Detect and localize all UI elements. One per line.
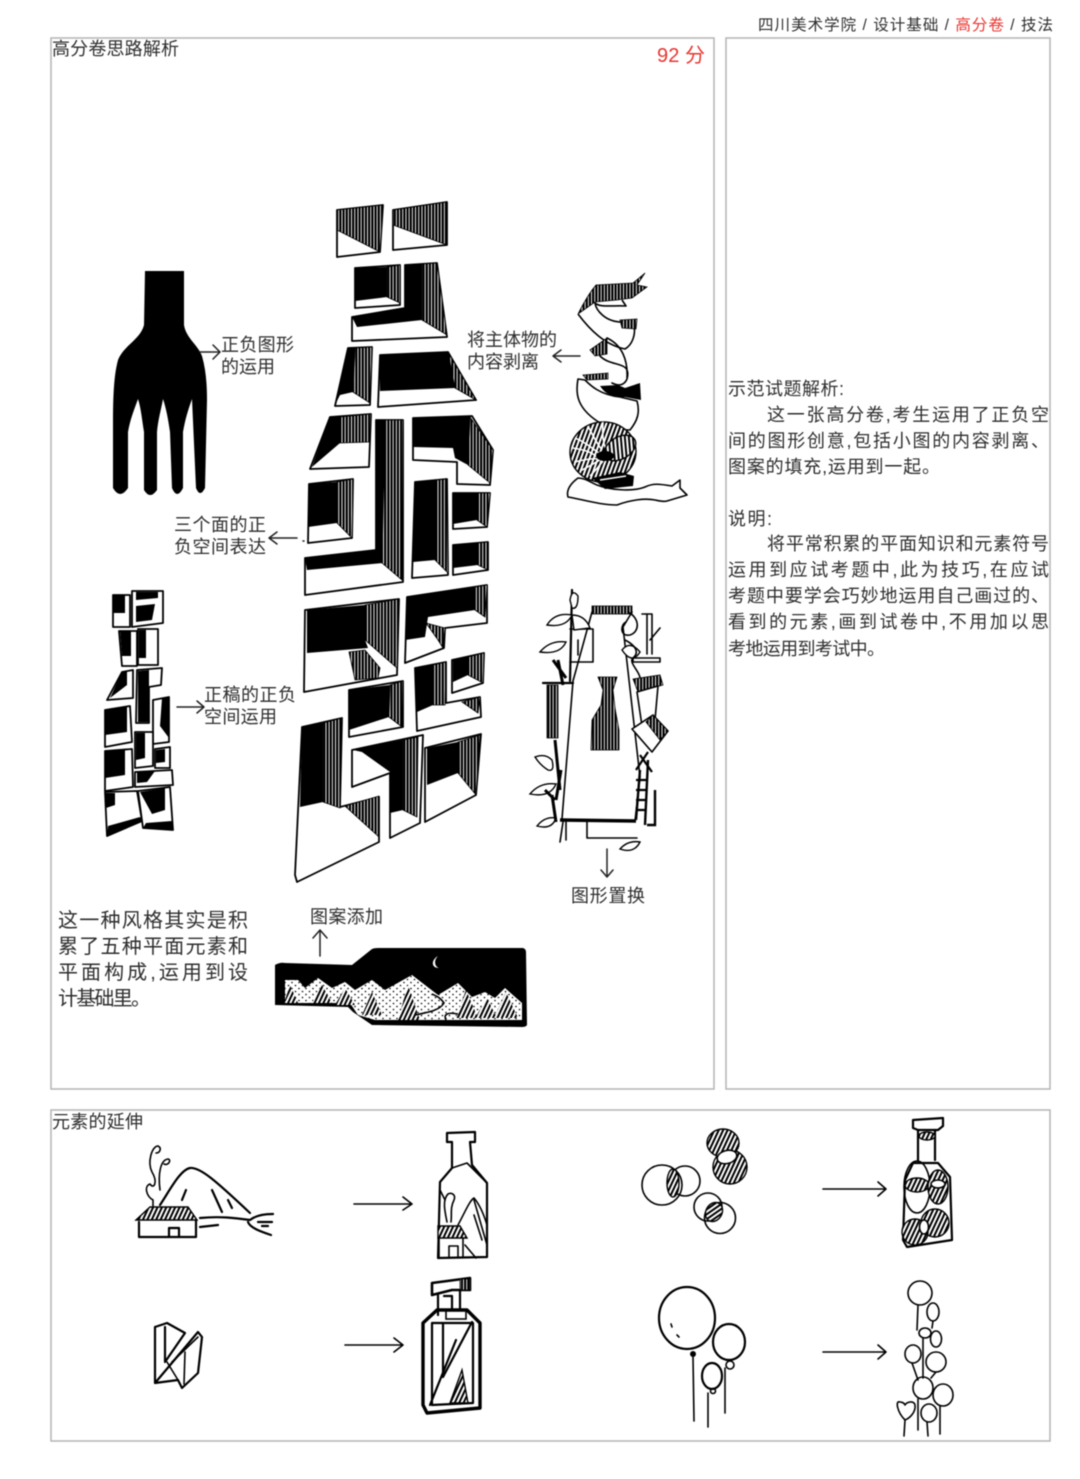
window: shoulder right bbox=[378, 352, 476, 407]
draft window nine bbox=[135, 732, 153, 768]
small draft bottle bbox=[105, 591, 173, 836]
house bbox=[438, 1226, 467, 1238]
window: central L column bbox=[305, 420, 403, 595]
window: shoulder left bbox=[335, 347, 372, 406]
window: right small two bbox=[453, 542, 488, 575]
text: exam analysis bbox=[728, 379, 1049, 659]
window: upper left bbox=[310, 414, 371, 469]
label: positive negative figure: 正负图形 bbox=[221, 335, 294, 355]
frame body bbox=[562, 612, 640, 821]
label: space usage: 空间运用 bbox=[204, 707, 277, 727]
neck ring bbox=[919, 1132, 935, 1140]
lower right dark ladder rungs bbox=[636, 752, 652, 810]
ribbon twist bbox=[590, 338, 607, 356]
trigger hatch bbox=[460, 1279, 470, 1290]
cap bbox=[913, 1118, 943, 1130]
wall and door bbox=[139, 1220, 196, 1237]
lower right ladder bbox=[636, 760, 655, 825]
label: content peeling: 内容剥离 bbox=[467, 352, 539, 372]
house body bbox=[439, 1238, 476, 1258]
river bbox=[415, 994, 458, 1020]
ribbon lower coil bbox=[592, 472, 634, 489]
mountain contour bbox=[440, 1163, 487, 1245]
line 2: 间的图形创意,包括小图的内容剥离、 bbox=[728, 431, 1049, 451]
label: three faces: 三个面的正 bbox=[174, 515, 266, 535]
coil center bbox=[596, 451, 614, 461]
right balloon bbox=[713, 1324, 745, 1413]
body bbox=[423, 1310, 480, 1413]
upper left hatch bbox=[905, 1178, 929, 1192]
N outer bbox=[155, 1323, 202, 1388]
panel: element extension bbox=[51, 1110, 1050, 1441]
line 3: 图案的填充,运用到一起。 bbox=[728, 457, 940, 477]
large balloon bbox=[659, 1287, 715, 1421]
draft window three bbox=[119, 631, 137, 666]
heading: high score analysis: 高分卷思路解析 bbox=[52, 39, 179, 59]
ribbon hatch bbox=[620, 319, 637, 329]
left stalk and tag bbox=[570, 590, 572, 681]
mountain bbox=[160, 1168, 250, 1213]
river bbox=[200, 1214, 273, 1235]
sketch: house and mountain bbox=[136, 1146, 273, 1237]
small balloon bbox=[702, 1363, 722, 1427]
snowy mountains bbox=[285, 975, 522, 1020]
draft window seven bbox=[153, 697, 169, 744]
upper left circle bbox=[904, 1161, 930, 1213]
window: right L shape bbox=[415, 662, 481, 731]
window: base center bbox=[352, 735, 423, 838]
window: top left bbox=[337, 205, 383, 257]
strings bbox=[904, 1305, 940, 1436]
draft window thirteen bbox=[105, 791, 142, 836]
smoke bbox=[444, 1193, 455, 1222]
bottle: house and mountain bbox=[438, 1132, 487, 1258]
label: pattern added: 图案添加 bbox=[310, 907, 383, 927]
roof bbox=[136, 1207, 197, 1220]
draft window eight bbox=[105, 706, 132, 747]
sketch: balloons bbox=[659, 1287, 745, 1427]
moon bbox=[433, 956, 439, 968]
left tag bbox=[570, 629, 593, 662]
label: usage: 的运用 bbox=[221, 357, 275, 377]
smoke bbox=[146, 1146, 170, 1206]
spray cap bbox=[432, 1278, 470, 1295]
lower hole bbox=[920, 1220, 928, 1234]
line 6: 考题中要学会巧妙地运用自己画过的、 bbox=[728, 586, 1049, 606]
label plate bbox=[446, 1311, 466, 1319]
window: base left bbox=[295, 718, 379, 882]
right loop and post bbox=[622, 612, 660, 654]
line 8: 考地运用到考试中。 bbox=[728, 639, 885, 659]
N inner bbox=[167, 1337, 198, 1384]
neck bbox=[918, 1130, 935, 1160]
draft window four bbox=[138, 629, 158, 665]
mini bottle bbox=[591, 677, 619, 750]
line 7: 看到的元素,画到试卷中,不用加以思 bbox=[728, 612, 1049, 632]
draft window fourteen bbox=[138, 787, 173, 830]
leaves dark detail bbox=[545, 660, 566, 822]
window: right small three bbox=[452, 653, 484, 693]
bottle outline bbox=[438, 1132, 487, 1258]
lower hatched circle right bbox=[921, 1209, 949, 1237]
draft window six bbox=[136, 668, 162, 723]
draft window two bbox=[132, 591, 163, 627]
right house hatch bbox=[646, 715, 668, 740]
bottom box bbox=[560, 822, 637, 842]
ribbon tail bbox=[567, 478, 687, 505]
line 3: 平面构成,运用到设 bbox=[58, 961, 248, 984]
main bottle illustration bbox=[295, 202, 493, 882]
bottle: balloon bunch bbox=[897, 1281, 953, 1436]
icon: black fork silhouette bbox=[113, 271, 207, 495]
lower hatched circle left bbox=[902, 1219, 928, 1245]
bottle silhouette bbox=[275, 948, 527, 1027]
ribbon black swath bbox=[600, 383, 641, 400]
draft window one bbox=[113, 595, 130, 627]
ribbon coil bbox=[568, 419, 638, 485]
ribbon illustration bbox=[567, 273, 687, 505]
window: upper right stepped bbox=[413, 416, 493, 485]
frame top hatch bbox=[592, 606, 632, 614]
window: center lower bbox=[349, 681, 403, 737]
draft window eleven bbox=[105, 749, 133, 791]
arrow: N to spray bottle bbox=[345, 1338, 403, 1352]
frame bottom bar bbox=[560, 820, 636, 821]
ribbon large band bbox=[577, 379, 638, 430]
sketch: interlocking rings bbox=[642, 1129, 747, 1234]
line 4: 计基础里。 bbox=[58, 987, 151, 1010]
heading: element extension: 元素的延伸 bbox=[52, 1112, 143, 1132]
window: lower left with object bbox=[304, 599, 399, 692]
right roof hatch bbox=[633, 675, 663, 692]
draft window twelve bbox=[135, 770, 173, 787]
ring pair one bbox=[642, 1165, 700, 1205]
bottle: spray with N bbox=[423, 1278, 480, 1413]
inner rect bbox=[430, 1322, 473, 1405]
line 1: 这一张高分卷,考生运用了正负空 bbox=[767, 405, 1049, 425]
hatched cylinder bbox=[707, 1129, 747, 1184]
right house two bbox=[632, 715, 668, 752]
leaf frame illustration bbox=[530, 590, 668, 850]
draft window five bbox=[107, 670, 133, 700]
analysis heading: 示范试题解析: bbox=[728, 379, 844, 399]
upper right hole bbox=[931, 1180, 945, 1188]
panel: high score analysis bbox=[51, 38, 714, 1089]
upper right circle bbox=[928, 1170, 948, 1204]
label: subject peeling: 将主体物的 bbox=[467, 330, 557, 350]
label: negative space: 负空间表达 bbox=[174, 537, 266, 557]
ribbon hatch band bbox=[583, 373, 608, 380]
trees bbox=[284, 985, 518, 1020]
text: style description bbox=[58, 909, 248, 1010]
label: image swap: 图形置换 bbox=[571, 886, 645, 906]
arrow: draft bottle bbox=[177, 701, 204, 713]
arrow: rings to bottle bbox=[823, 1182, 886, 1196]
panel: explanation bbox=[726, 38, 1050, 1089]
window: mid left bbox=[308, 479, 353, 543]
window: right small one bbox=[453, 493, 490, 529]
ribbon upper band bbox=[578, 300, 635, 349]
line 4: 将平常积累的平面知识和元素符号 bbox=[767, 534, 1049, 554]
note heading: 说明: bbox=[728, 509, 772, 529]
hatch bbox=[450, 1370, 468, 1403]
right shelf bbox=[625, 640, 660, 678]
window: neck left bbox=[355, 265, 400, 308]
draft window ten bbox=[155, 747, 170, 768]
arrow: pattern up bbox=[313, 930, 327, 956]
left hatched bottle bbox=[547, 685, 558, 738]
ribbon lower path bbox=[600, 338, 628, 385]
window: base right bbox=[425, 734, 481, 822]
coil lines bbox=[573, 422, 606, 476]
arrow: ribbon to label bbox=[553, 350, 580, 362]
window: mid tall bbox=[412, 479, 448, 578]
right house one bbox=[637, 686, 658, 726]
sketch: folded N shape bbox=[155, 1323, 202, 1388]
window: top right bbox=[393, 202, 447, 250]
line 2: 累了五种平面元素和 bbox=[58, 935, 248, 958]
neck bbox=[438, 1290, 460, 1315]
bottle: rings bbox=[902, 1118, 952, 1247]
ring pair two bbox=[694, 1193, 736, 1234]
ribbon lower white bbox=[600, 476, 626, 480]
line 1: 这一种风格其实是积 bbox=[58, 909, 248, 932]
arrow: house to bottle bbox=[354, 1197, 412, 1210]
balloons bbox=[897, 1281, 953, 1422]
window: lower right stepped bbox=[405, 585, 487, 663]
line 5: 运用到应试考题中,此为技巧,在应试 bbox=[728, 560, 1049, 580]
ribbon top flag bbox=[578, 273, 647, 314]
score: 92 分 bbox=[657, 44, 705, 67]
body bbox=[903, 1163, 952, 1247]
arrow: frame down bbox=[601, 849, 613, 877]
arrow: fork to label bbox=[200, 345, 220, 359]
left shelf bbox=[543, 682, 573, 684]
arrow: three faces bbox=[269, 532, 304, 544]
breadcrumb header: 四川美术学院 / 设计基础 / 高分卷 / 技法 bbox=[758, 15, 1053, 34]
leaves bbox=[530, 593, 640, 850]
window: neck L shape bbox=[352, 263, 447, 341]
coil inner swirl bbox=[600, 430, 640, 466]
black bottle with mountains bbox=[275, 948, 527, 1027]
arrow: balloons to bunch bbox=[823, 1345, 886, 1359]
label: draft: 正稿的正负 bbox=[204, 685, 296, 705]
